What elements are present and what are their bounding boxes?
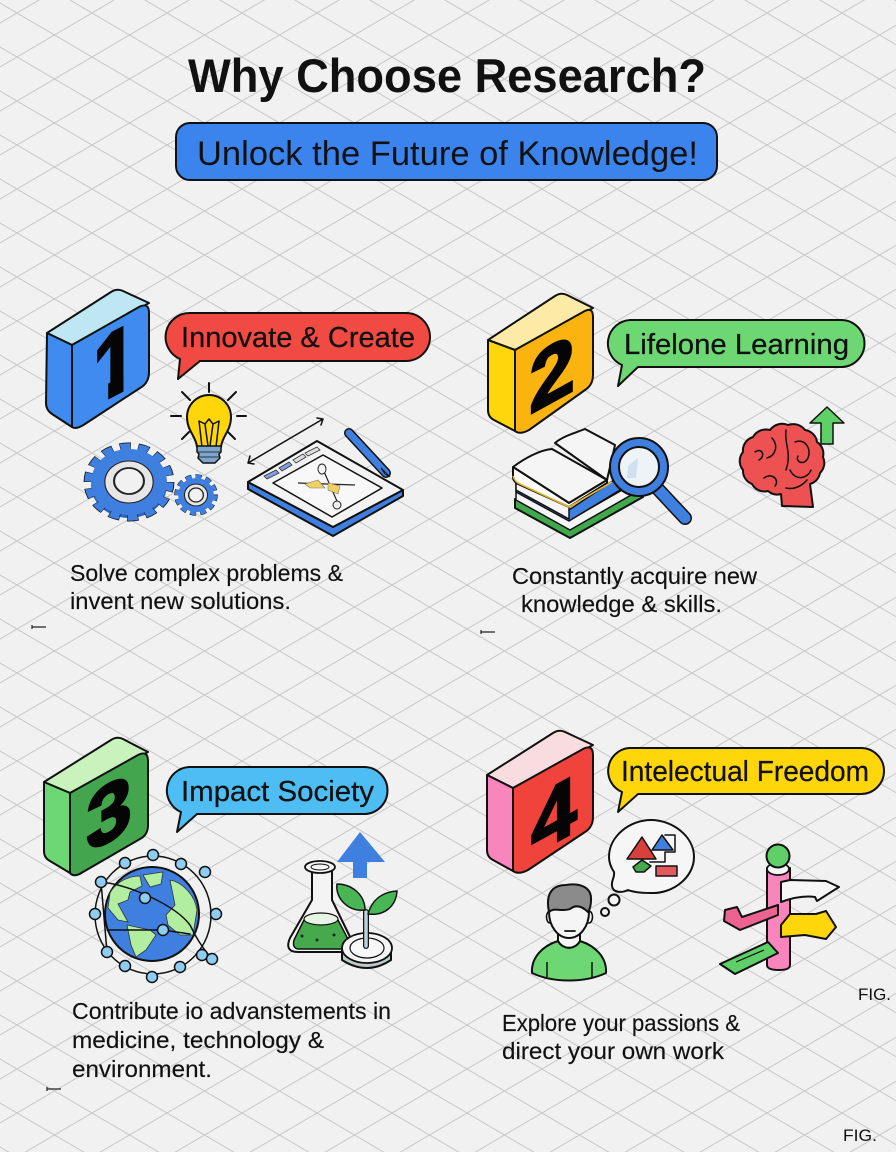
- small gear: [177, 477, 215, 513]
- white sign: [781, 880, 839, 902]
- icon: design tablet: [248, 418, 403, 536]
- description 3: Contribute io advanstements in: [72, 998, 391, 1024]
- description 3: environment.: [72, 1056, 212, 1082]
- seedling dish: [342, 948, 391, 968]
- blue arrow: [337, 832, 385, 878]
- number block 4: [487, 731, 593, 873]
- figure label lower: FIG.: [843, 1126, 877, 1145]
- icon: flask and seedling: [288, 832, 397, 968]
- description 2: Constantly acquire new: [512, 563, 757, 589]
- description 1: invent new solutions.: [70, 588, 291, 614]
- icon: light bulb: [171, 383, 246, 463]
- description 1: Solve complex problems &: [70, 560, 343, 586]
- icon: books and magnifying glass: [513, 429, 685, 538]
- icon: connected globe: [90, 850, 222, 982]
- icon: brain: [740, 424, 824, 507]
- number block 1: [46, 290, 149, 428]
- network nodes: [90, 850, 222, 982]
- subtitle banner: [176, 123, 717, 180]
- speech bubble: Impact Society: Impact Society: [181, 776, 375, 808]
- leaves: [337, 884, 365, 910]
- blue book: [516, 476, 625, 521]
- pen: [349, 433, 390, 477]
- icon: gears: [89, 447, 215, 518]
- flask: [288, 869, 354, 952]
- green sign: [720, 942, 778, 974]
- speech bubble: Innovate & Create: Innovate & Create: [181, 322, 415, 354]
- icon: person: [532, 884, 606, 980]
- panel: lifelong learning: [488, 294, 864, 617]
- globe: [105, 867, 199, 961]
- speech bubble: Intelectual Freedom: [608, 748, 884, 812]
- number block 3: 3: [86, 754, 132, 871]
- speech bubble: Lifelone Learning: [608, 320, 864, 386]
- speech bubble: Lifelone Learning: Lifelone Learning: [624, 329, 849, 361]
- icon: green up arrow: [810, 407, 844, 444]
- number block 1: 1: [93, 301, 137, 428]
- pink sign: [724, 905, 778, 930]
- number block 2: 2: [529, 315, 575, 432]
- number block 4: 4: [531, 756, 577, 873]
- description 4: Explore your passions &: [502, 1010, 740, 1036]
- description 4: direct your own work: [502, 1038, 725, 1064]
- yellow sign: [781, 911, 836, 939]
- number block 2: [488, 294, 593, 433]
- description 2: knowledge & skills.: [521, 591, 722, 617]
- panel: innovate and create: [46, 290, 430, 614]
- number block 3: [44, 738, 148, 875]
- icon: signpost: [720, 844, 839, 974]
- panel: intellectual freedom: [487, 731, 884, 1064]
- title: Why Choose Research?: [188, 49, 706, 102]
- open book: [555, 429, 615, 480]
- speech bubble: Intelectual Freedom: Intelectual Freedom: [621, 756, 869, 788]
- description 3: medicine, technology &: [72, 1027, 324, 1053]
- panel: impact society: [44, 738, 397, 1082]
- speech bubble: Innovate & Create: [166, 313, 430, 379]
- icon: thought bubble with shapes: [601, 820, 694, 916]
- subtitle banner: Unlock the Future of Knowledge!: [197, 135, 698, 173]
- figure label: FIG.: [858, 985, 891, 1004]
- green book: [515, 488, 643, 538]
- magnifying glass: [657, 488, 685, 518]
- speech bubble: Impact Society: [167, 767, 387, 832]
- large gear: [89, 447, 169, 518]
